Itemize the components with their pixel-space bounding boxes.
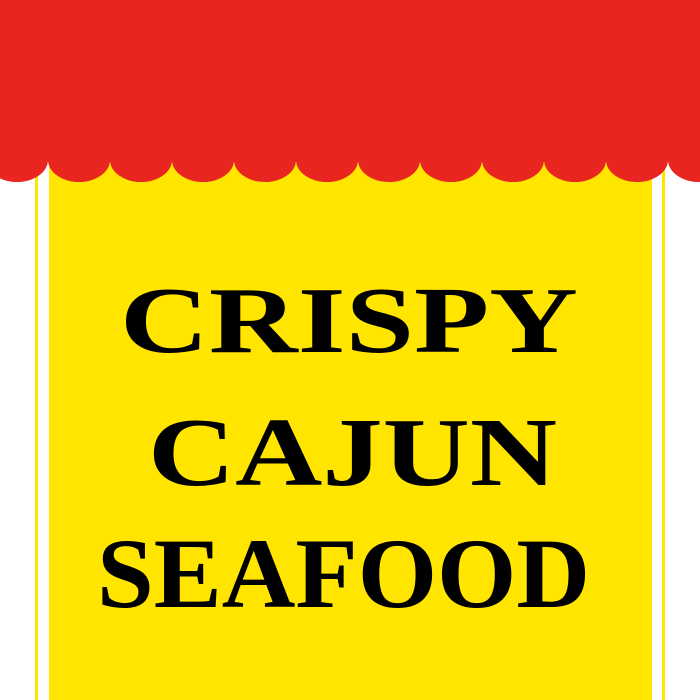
yellow panel: [49, 150, 652, 700]
awning: [0, 0, 700, 182]
title: [97, 269, 590, 629]
right thin stripe: [662, 150, 665, 700]
left thin stripe: [35, 150, 38, 700]
title: SEAFOOD: [97, 518, 590, 629]
title: CRISPY: [120, 269, 578, 373]
title: CAJUN: [148, 399, 557, 507]
